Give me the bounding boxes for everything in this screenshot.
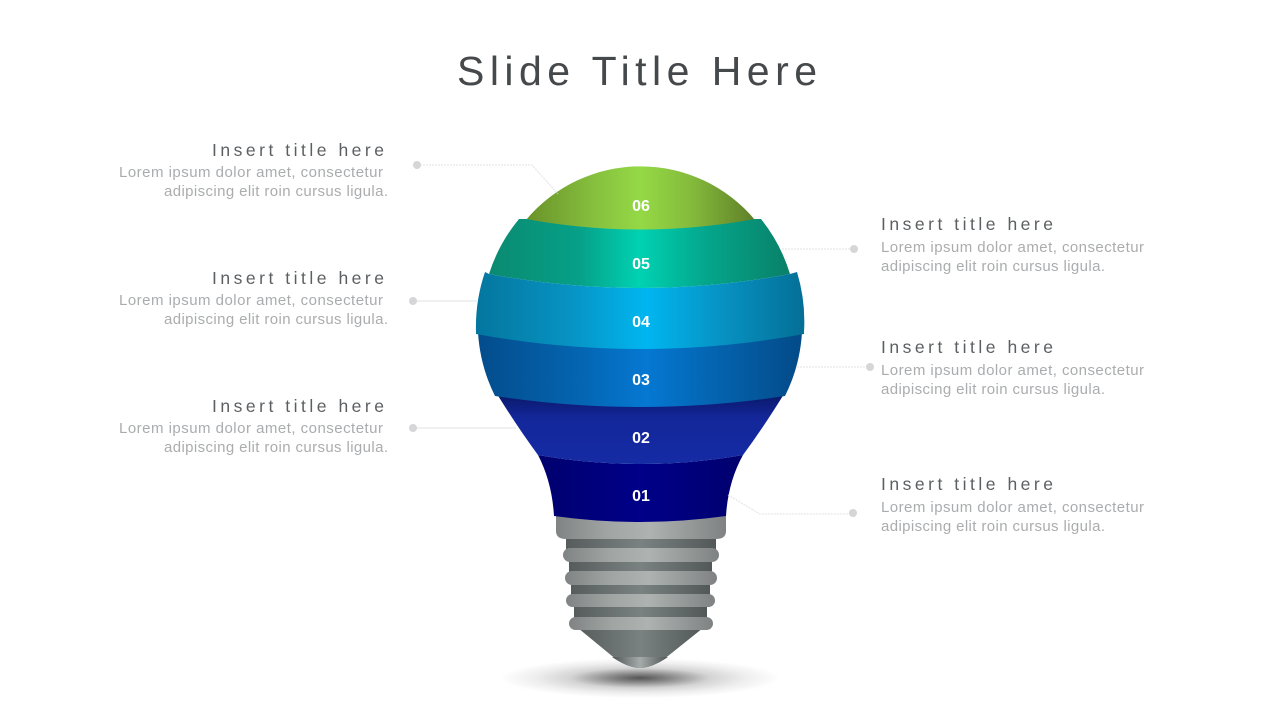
callout: middle right xyxy=(797,337,1144,398)
callout: top left: Lorem ipsum dolor amet, consectetur xyxy=(119,164,383,181)
callout: top right: Lorem ipsum dolor amet, consectetur xyxy=(881,239,1144,256)
callout: middle left: adipiscing elit roin cursus ligula. xyxy=(164,311,388,328)
callout: bottom right xyxy=(728,474,1144,535)
band 04 xyxy=(476,272,804,349)
band 03 xyxy=(478,332,802,407)
band 02 xyxy=(497,394,784,464)
bulb base xyxy=(556,514,726,668)
callout: top right: adipiscing elit roin cursus ligula. xyxy=(881,258,1105,275)
callout: bottom left: Insert title here xyxy=(212,396,384,416)
step numbers: 03 xyxy=(632,372,650,389)
shadow under bulb xyxy=(500,658,780,698)
callout: top right: Insert title here xyxy=(881,214,1053,234)
band 06 xyxy=(526,166,755,230)
band 05 xyxy=(489,219,790,288)
callout: middle right: Insert title here xyxy=(881,337,1053,357)
callout: top left: Insert title here xyxy=(212,140,384,160)
step numbers: 05 xyxy=(632,256,650,273)
step numbers: 01 xyxy=(632,488,650,505)
callout: top left xyxy=(119,140,558,200)
callout: bottom right: adipiscing elit roin cursus ligula. xyxy=(881,518,1105,535)
band 01 xyxy=(538,455,743,522)
light bulb xyxy=(476,166,804,668)
step numbers: 06 xyxy=(632,198,650,215)
callout: middle right: adipiscing elit roin cursus ligula. xyxy=(881,381,1105,398)
callout: middle left xyxy=(119,268,477,328)
callout: bottom right: Insert title here xyxy=(881,474,1053,494)
step numbers: 02 xyxy=(632,430,650,447)
callout: bottom right: Lorem ipsum dolor amet, consectetur xyxy=(881,499,1144,516)
callout: middle right: Lorem ipsum dolor amet, consectetur xyxy=(881,362,1144,379)
callout: bottom left xyxy=(119,396,516,456)
step numbers xyxy=(632,198,650,505)
step numbers: 04 xyxy=(632,314,650,331)
callout: middle left: Insert title here xyxy=(212,268,384,288)
title: Slide Title Here xyxy=(457,48,817,94)
callout: middle left: Lorem ipsum dolor amet, consectetur xyxy=(119,292,383,309)
callout: bottom left: adipiscing elit roin cursus ligula. xyxy=(164,439,388,456)
callout: top right xyxy=(782,214,1144,275)
callout: top left: adipiscing elit roin cursus ligula. xyxy=(164,183,388,200)
callout: bottom left: Lorem ipsum dolor amet, consectetur xyxy=(119,420,383,437)
